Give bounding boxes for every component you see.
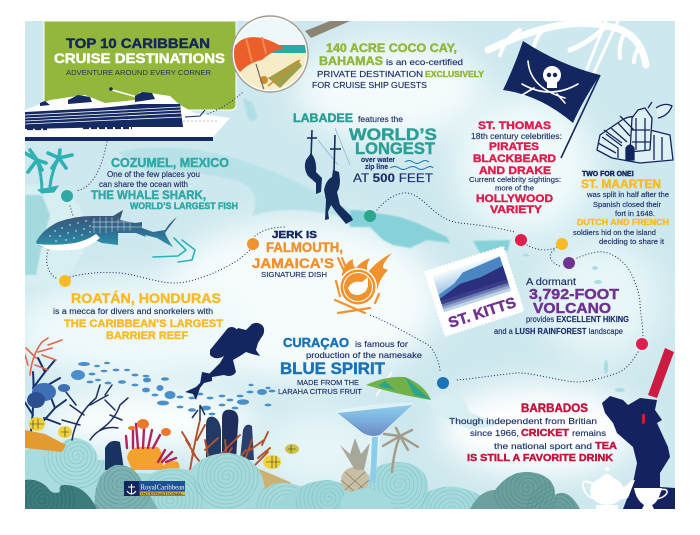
callout: St. Kitts volcano <box>494 277 629 336</box>
callout: Cozumel: One of the few places you <box>107 170 200 179</box>
cruise ship <box>25 87 230 141</box>
callout: Curacao: BLUE SPIRIT <box>280 360 385 378</box>
whale shark <box>36 210 177 251</box>
callout: Coco Cay: FOR CRUISE SHIP GUESTS <box>312 81 427 90</box>
callout: Barbados: TEA <box>595 441 617 452</box>
callout: St. Thomas: Current celebrity sightings: <box>469 175 561 184</box>
palm trees: teal <box>25 150 72 193</box>
callout: Curacao: LARAHA CITRUS FRUIT <box>278 387 362 396</box>
callout: St. Maarten: was split in half after the <box>586 190 669 199</box>
route: ship to lens <box>205 92 243 115</box>
callout: Curacao: production of the namesake <box>306 350 422 360</box>
coral reef left <box>22 338 128 440</box>
callout: Jerk <box>252 229 343 279</box>
callout: Labadee: WORLD’S <box>349 125 437 144</box>
dotted routes across the map <box>47 193 643 382</box>
callout: St. Maarten <box>573 169 669 246</box>
callout: Barbados: the national sport and <box>494 441 592 451</box>
map: Yucatan <box>25 185 86 285</box>
callout: Roatan: THE CARIBBEAN’S LARGEST <box>64 318 223 330</box>
coral reef centre <box>105 419 180 472</box>
callout: Coco Cay: PRIVATE DESTINATION <box>317 70 423 79</box>
callout: Coco Cay: 140 ACRE COCO CAY, <box>326 43 457 55</box>
callout: Labadee: LONGEST <box>355 139 436 158</box>
callout: Labadee: over water <box>361 157 395 164</box>
callout: St. Maarten: DUTCH AND FRENCH <box>577 217 669 227</box>
callout: St. Thomas: VARIETY <box>490 204 543 216</box>
palm trees: white <box>488 21 646 82</box>
stamp: St. Kitts <box>425 247 524 336</box>
callout: Roatan: is a mecca for divers and snorkelers with <box>53 307 213 316</box>
callout: St. Maarten: fort in 1648. <box>615 209 655 218</box>
callout: Roatan: BARRIER REEF <box>106 330 188 342</box>
callout: Cozumel: WORLD’S LARGEST FISH <box>130 201 238 211</box>
callout: Coco Cay: BAHAMAS <box>319 56 383 68</box>
callout: St. Thomas: PIRATES <box>489 141 539 153</box>
stingray outline <box>153 238 195 262</box>
callout: Curacao <box>278 335 422 396</box>
callout: St. Kitts volcano: provides EXCELLENT HIKING <box>526 315 629 324</box>
callout: Jerk: JAMAICA’S <box>252 255 334 271</box>
callout: Coco Cay <box>312 43 484 90</box>
location dots <box>59 190 648 389</box>
callout: St. Thomas: BLACKBEARD <box>473 153 556 165</box>
callout: Jerk: FALMOUTH, <box>266 239 343 255</box>
callout: Labadee: AT 500 FEET <box>353 173 433 185</box>
callout: St. Maarten: ST. MAARTEN <box>581 179 661 191</box>
wave: far-left light <box>25 438 106 505</box>
coral reef right <box>182 405 300 500</box>
Royal Caribbean logo <box>124 481 185 496</box>
callout: Barbados <box>449 403 617 464</box>
illustration: pineapple <box>340 438 370 493</box>
callout: St. Thomas: ST. THOMAS <box>478 120 551 132</box>
callout: Jerk: JERK IS <box>272 229 317 241</box>
title line 1: TOP 10 CARIBBEAN <box>66 36 210 51</box>
scuba diver silhouette <box>185 323 264 400</box>
callout: Curacao: CURAÇAO <box>283 335 349 350</box>
callout: Labadee: features the <box>358 115 403 124</box>
Royal Caribbean logo: RoyalCaribbean <box>140 484 185 492</box>
icon: fort sketch <box>597 102 673 163</box>
pirate flag <box>503 41 600 123</box>
zip-liner silhouette <box>305 128 353 224</box>
callout: Cozumel: THE WHALE SHARK, <box>91 188 206 202</box>
map: Cuba <box>118 147 350 227</box>
callout: St. Maarten: Spanish closed their <box>593 200 661 209</box>
callout: Curacao: MADE FROM THE <box>297 378 359 387</box>
callout: Labadee: LABADEE <box>293 113 353 125</box>
callout: St. Kitts volcano: VOLCANO <box>533 301 611 317</box>
map: small islands <box>523 254 625 392</box>
callout: Labadee <box>293 113 437 185</box>
magnifier handle <box>305 21 350 38</box>
callout: Coco Cay: is an eco-certified <box>386 57 463 67</box>
teapot <box>583 467 635 509</box>
callout: St. Thomas: more of the <box>495 184 534 192</box>
illustration: blue cocktail <box>336 372 431 482</box>
callout: Cozumel: can share the ocean with <box>99 180 188 189</box>
subtitle: ADVENTURE AROUND EVERY CORNER <box>66 68 211 77</box>
callout: Curacao: is famous for <box>355 339 408 349</box>
cricketer silhouette <box>602 348 675 509</box>
callout: Cozumel: COZUMEL, MEXICO <box>111 156 229 170</box>
map: Puerto Rico <box>473 240 510 253</box>
callout: Barbados: since 1966, <box>470 428 519 438</box>
callout: St. Thomas: HOLLYWOOD <box>476 193 553 205</box>
stamp label: ST. KITTS <box>446 294 518 332</box>
callout: St. Thomas: 18th century celebrities: <box>471 132 562 141</box>
Royal Caribbean logo: INTERNATIONAL <box>141 492 183 496</box>
callout: St. Thomas <box>469 120 562 216</box>
callout: St. Maarten: TWO FOR ONE! <box>582 169 634 178</box>
fish and sand left <box>25 417 72 452</box>
callout: Coco Cay: EXCLUSIVELY <box>425 69 484 79</box>
callout: Barbados: IS STILL A FAVORITE DRINK <box>467 453 614 464</box>
callout: St. Kitts volcano: and a LUSH RAINFOREST landscape <box>494 327 623 336</box>
callout: Roatan: ROATÁN, HONDURAS <box>71 290 221 306</box>
callout: Barbados: BARBADOS <box>521 403 588 415</box>
fish school <box>71 362 276 415</box>
callout: St. Kitts volcano: A dormant <box>526 277 576 288</box>
title panel <box>44 21 236 110</box>
callout: Roatan <box>53 290 223 342</box>
callout: St. Maarten: soldiers hid on the island <box>573 228 656 237</box>
icon: jerk chicken flame <box>335 253 392 313</box>
callout: Jerk: SIGNATURE DISH <box>261 270 327 279</box>
callout: Cozumel <box>91 156 238 211</box>
map: Hispaniola <box>350 210 450 248</box>
callout: Barbados: Though independent from Britian <box>449 416 597 426</box>
waves: foreground <box>25 453 580 509</box>
callout: Barbados: remains <box>572 428 606 438</box>
callout: St. Thomas: AND DRAKE <box>479 165 551 177</box>
illustration: palm tree <box>383 428 418 472</box>
callout: Barbados: CRICKET <box>521 428 569 439</box>
callout: Labadee: zip line <box>365 164 388 171</box>
map: northern South America <box>428 399 500 430</box>
foreground wave over cocktail base <box>340 488 395 509</box>
map: Bahamas <box>243 98 258 122</box>
callout: St. Maarten: deciding to share it <box>599 237 665 246</box>
route: ship to Cozumel <box>76 142 107 191</box>
callout: St. Kitts volcano: 3,792-FOOT <box>529 287 619 303</box>
title line 2: CRUISE DESTINATIONS <box>54 51 225 66</box>
magnifying lens with beach umbrella <box>232 16 308 92</box>
teacup <box>634 488 667 509</box>
flag pole <box>561 75 600 158</box>
